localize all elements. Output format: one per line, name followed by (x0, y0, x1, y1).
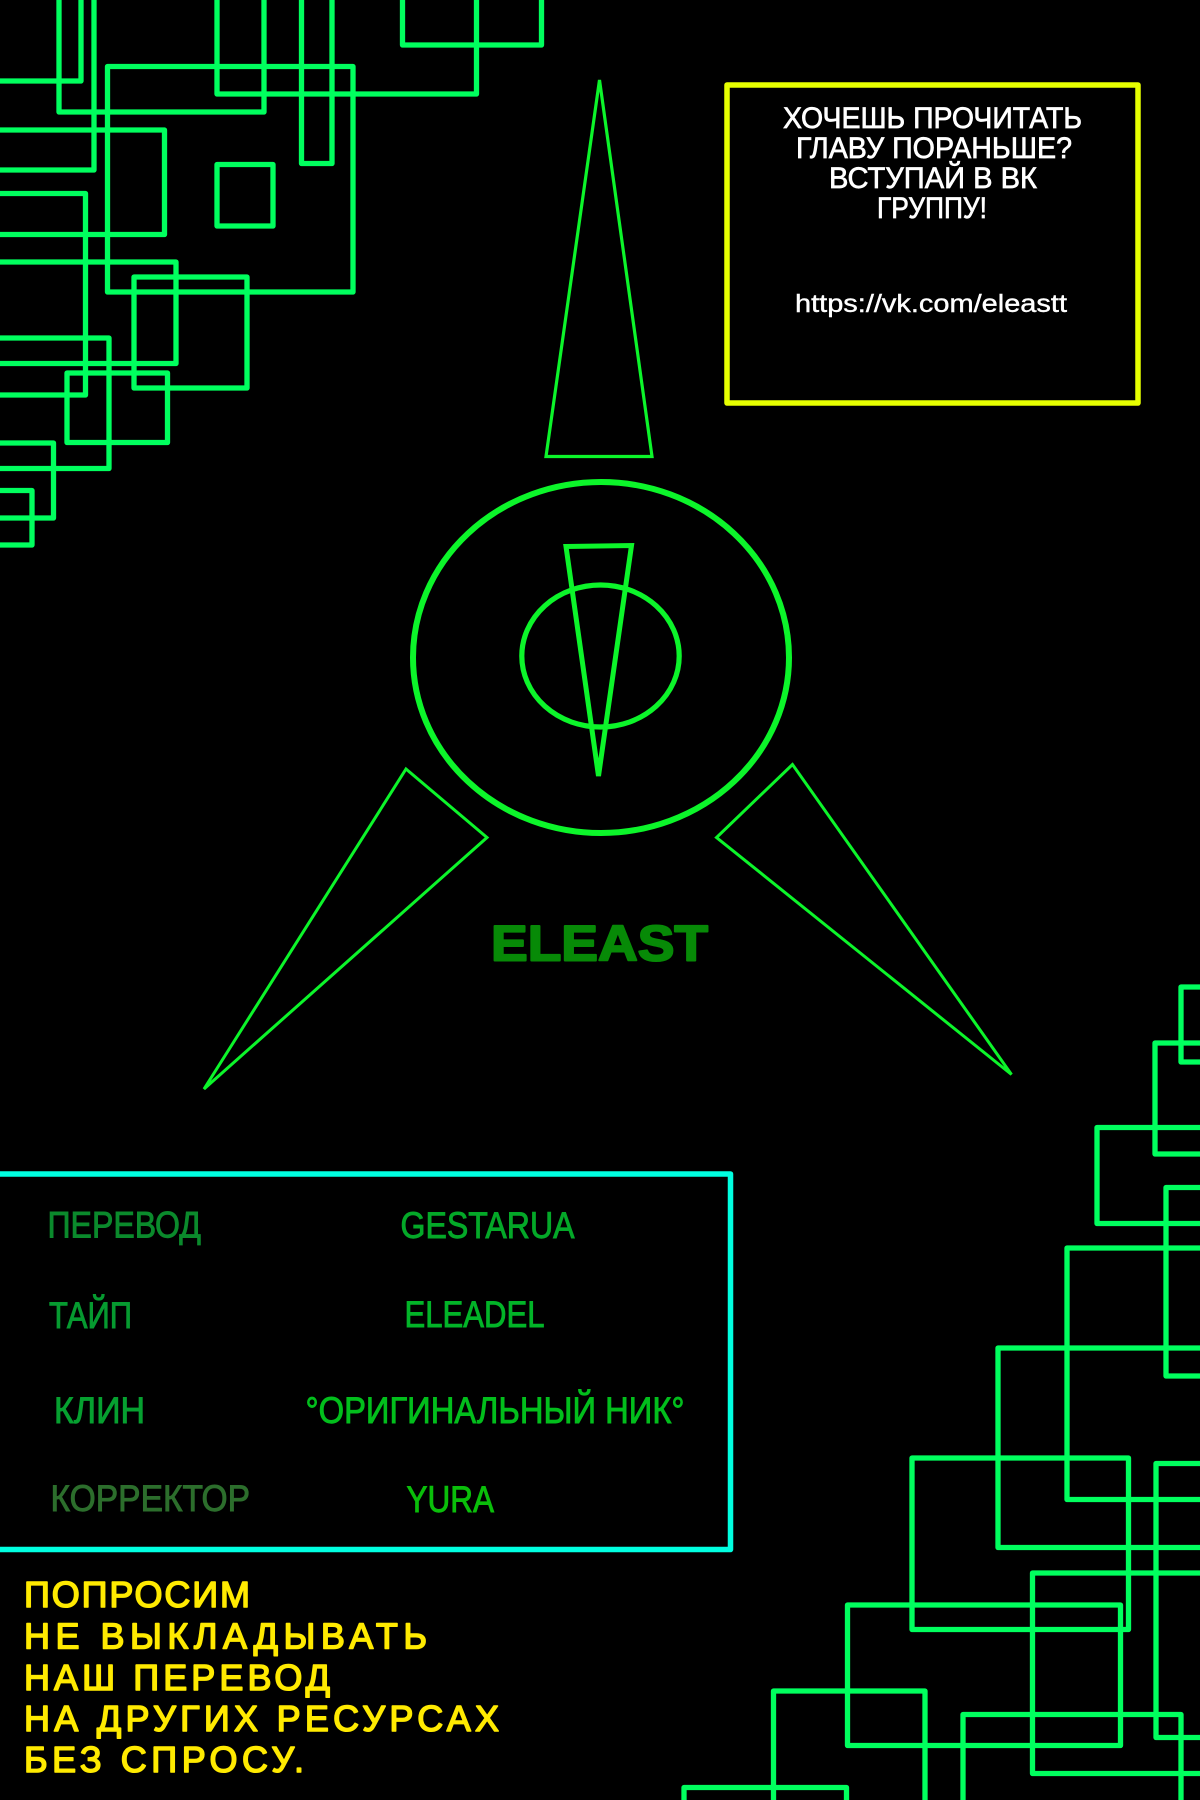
outer ellipse (413, 482, 789, 833)
panel: VK group callout (727, 85, 1138, 403)
credits rows: ELEADEL (404, 1294, 544, 1335)
inner spike triangle (566, 546, 632, 776)
right spike triangle (716, 764, 1012, 1074)
callout text: ГРУППУ! (877, 192, 987, 225)
credits rows (48, 1204, 684, 1520)
notice text: ПОПРОСИМ (24, 1574, 250, 1615)
credits rows: ТАЙП (49, 1294, 132, 1336)
callout text: ХОЧЕШЬ ПРОЧИТАТЬ (783, 102, 1082, 135)
notice text: НАШ ПЕРЕВОД (24, 1657, 330, 1698)
decoration: top-left outlined rectangles (0, 0, 542, 545)
top spike triangle (546, 80, 652, 456)
notice text: НА ДРУГИХ РЕСУРСАХ (24, 1698, 499, 1739)
panel: credits (0, 1174, 730, 1550)
notice text: НЕ ВЫКЛАДЫВАТЬ (24, 1616, 427, 1656)
notice text (24, 1574, 499, 1780)
logo emblem (204, 80, 1012, 1089)
credits rows: GESTARUA (400, 1205, 575, 1246)
logo wordmark: ELEAST (491, 916, 708, 972)
callout link text: https://vk.com/eleastt (795, 290, 1067, 318)
credits rows: КОРРЕКТОР (50, 1478, 250, 1519)
credits rows: YURA (406, 1479, 494, 1520)
inner ellipse (522, 585, 679, 727)
credits rows: ПЕРЕВОД (48, 1204, 201, 1246)
callout text: ГЛАВУ ПОРАНЬШЕ? (796, 132, 1072, 165)
credits rows: °ОРИГИНАЛЬНЫЙ НИК° (306, 1389, 684, 1431)
credits rows: КЛИН (54, 1390, 145, 1431)
callout text (783, 102, 1082, 225)
left spike triangle (204, 769, 487, 1089)
callout text: ВСТУПАЙ В ВК (829, 161, 1037, 195)
notice text: БЕЗ СПРОСУ. (24, 1739, 304, 1780)
decoration: bottom-right outlined rectangles (684, 987, 1200, 1800)
